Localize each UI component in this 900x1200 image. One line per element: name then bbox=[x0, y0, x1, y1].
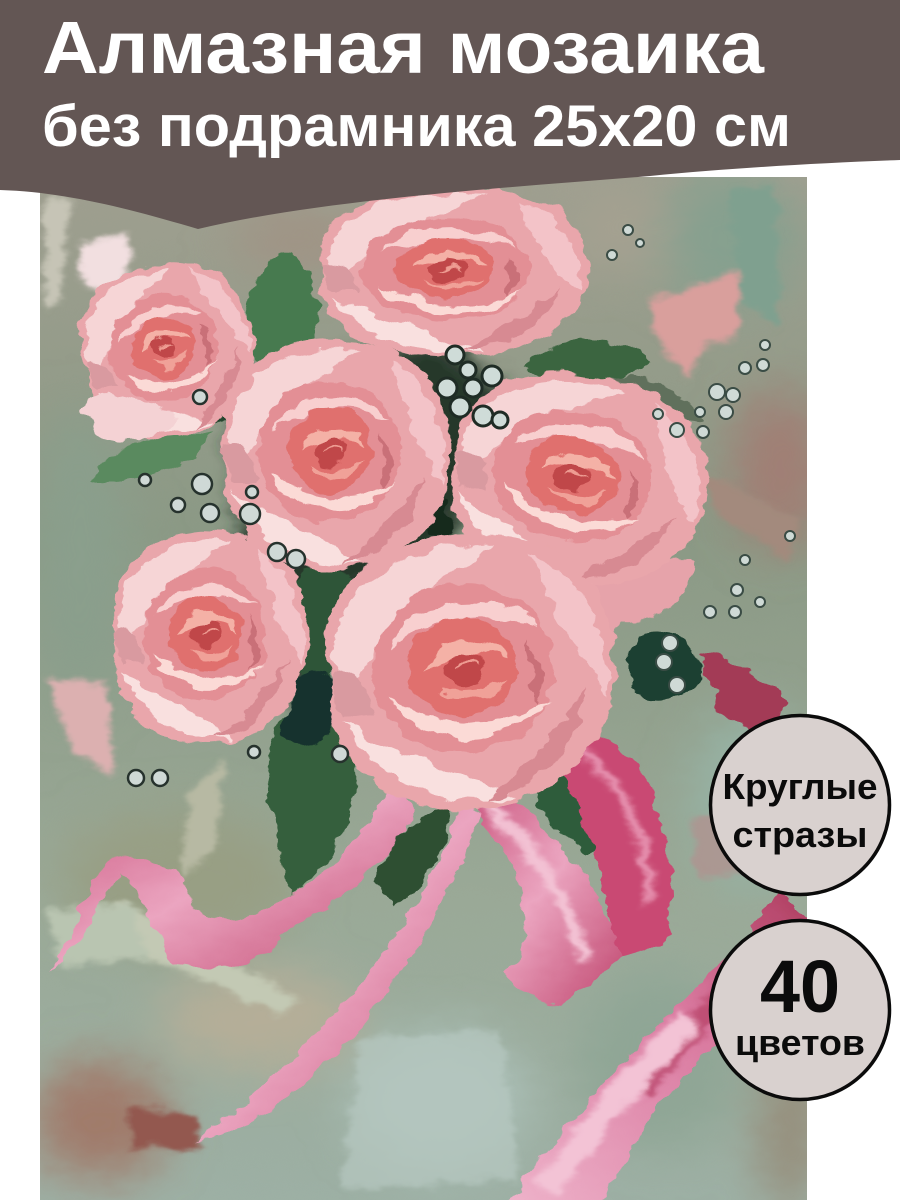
rose: right bbox=[450, 368, 710, 579]
title line 1: Алмазная мозаика bbox=[42, 6, 765, 89]
rose: small left bbox=[76, 262, 257, 440]
crystals: centre cluster bbox=[437, 346, 508, 428]
crystals: right sprays bbox=[607, 225, 795, 693]
ribbon: right bow bbox=[563, 736, 675, 956]
rose: pale petal under small left rose bbox=[82, 396, 180, 440]
ribbon: dark right loop bbox=[700, 650, 785, 735]
rose: front large bbox=[324, 534, 619, 812]
rose: middle bbox=[223, 340, 449, 571]
painting background bbox=[20, 160, 830, 1200]
badge: round rhinestones: стразы bbox=[732, 814, 868, 855]
badge: round rhinestones: Круглые bbox=[722, 766, 878, 807]
badge: 40 colours: цветов bbox=[735, 1022, 865, 1063]
dark shadow behind bouquet bbox=[230, 340, 520, 720]
ribbon: left curl bbox=[50, 778, 414, 972]
panel: painting of roses bbox=[20, 160, 830, 1200]
badge: round rhinestones bbox=[710, 716, 890, 894]
leaves bbox=[92, 250, 705, 908]
brush strokes and pink patches bbox=[45, 185, 800, 1190]
badge: 40 colours bbox=[710, 920, 890, 1100]
title line 2: без подрамника 25х20 см bbox=[42, 94, 791, 159]
crystals: left and lower clusters bbox=[128, 390, 348, 786]
rose: top bbox=[320, 187, 587, 357]
ribbon: thin trailing centre bbox=[195, 805, 480, 1140]
header banner bbox=[0, 0, 900, 229]
ribbon: long lower-right tail bbox=[505, 888, 815, 1200]
badge: 40 colours: 40 bbox=[760, 945, 840, 1028]
rose: lower left bbox=[114, 531, 308, 745]
rose: right lower petals bbox=[595, 558, 696, 640]
